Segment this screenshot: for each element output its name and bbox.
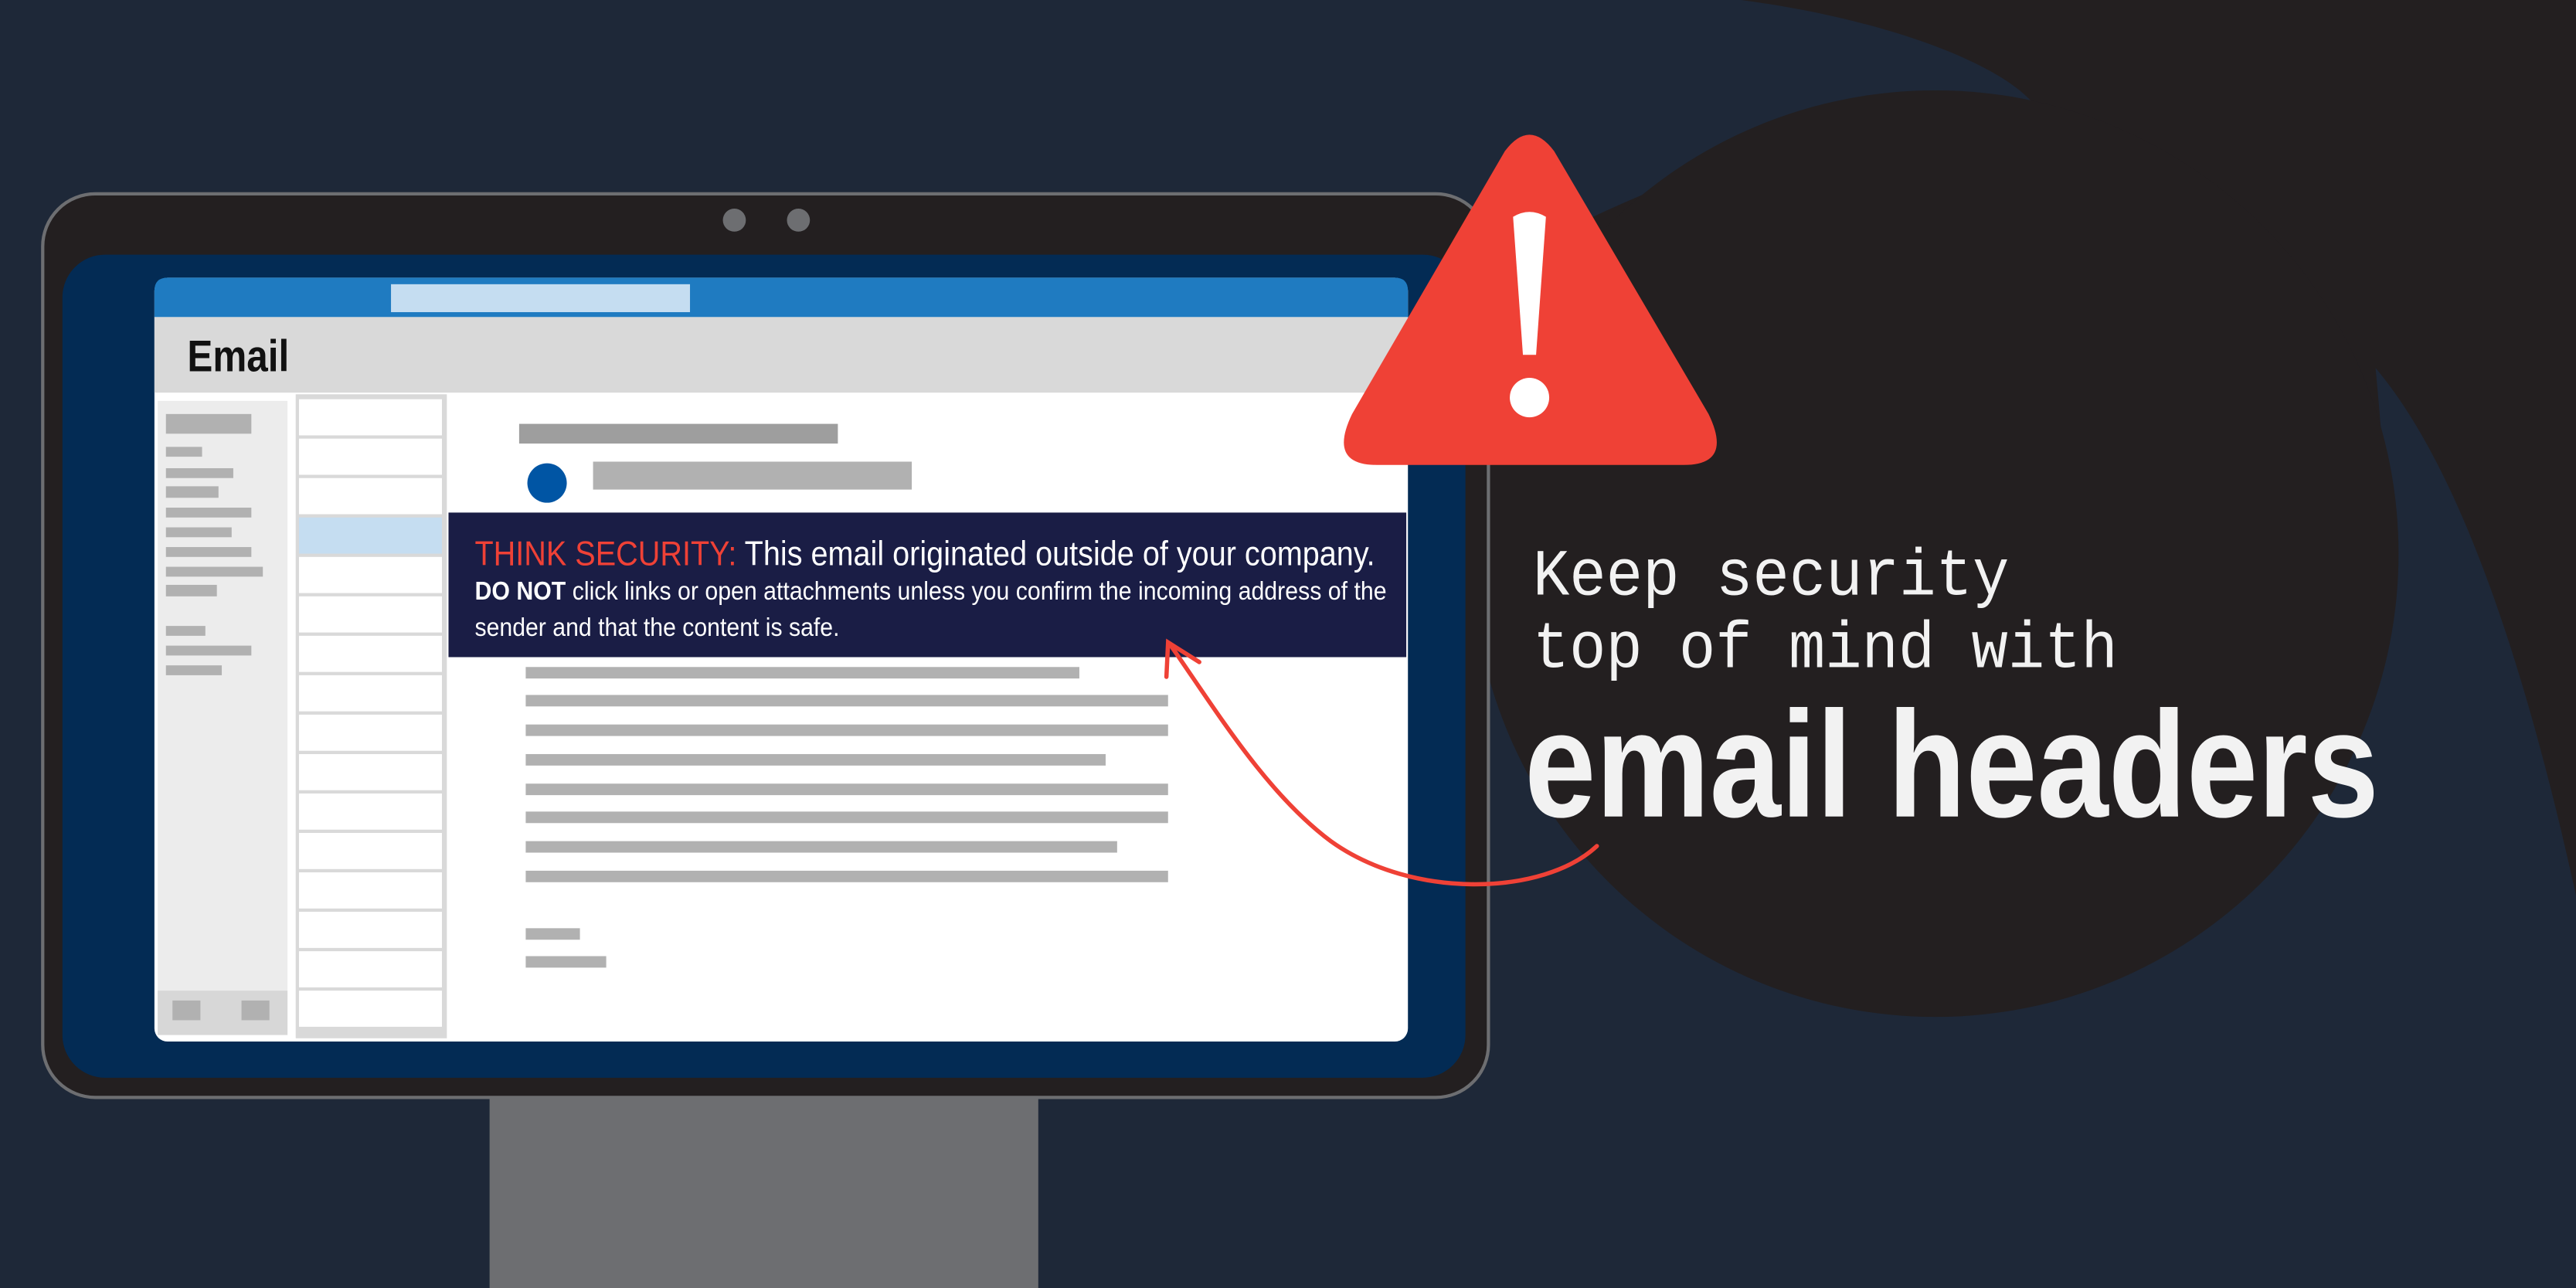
email window [155,277,1408,1042]
title text: Keep security [1533,540,2009,615]
sidebar [158,401,287,1035]
monitor [42,194,1488,1097]
callout: security banner: sender and that the content is safe. [474,613,840,641]
callout: security banner [448,512,1406,658]
arrow: red curved [1167,642,1597,884]
dark swirl background [1472,0,2576,1017]
title text: email headers [1524,681,2379,849]
title text: top of mind with [1533,612,2118,687]
title text [1524,540,2379,849]
email content placeholders [519,424,1168,967]
message list [296,394,447,1038]
heading: Email: Email [187,332,289,382]
monitor stand [490,1094,1038,1288]
callout: security banner: DO NOT click links or open attachments unless you confirm the incoming address of the [474,576,1387,605]
icon: cameras [723,209,810,232]
callout: security banner: THINK SECURITY: This email originated outside of your company. [474,535,1375,573]
icon: warning triangle [1344,134,1717,465]
